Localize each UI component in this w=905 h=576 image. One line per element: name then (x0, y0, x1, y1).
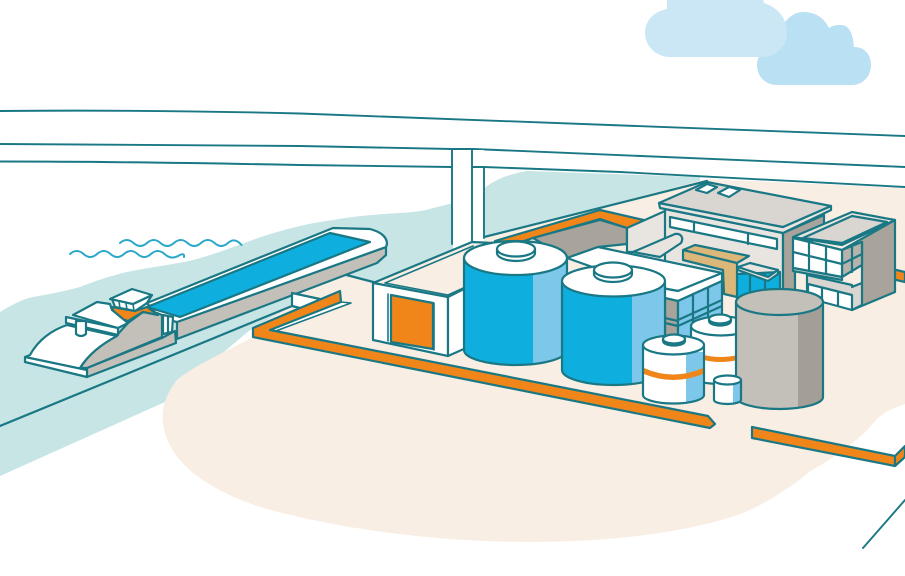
tan portico (683, 245, 749, 297)
road edge line (863, 500, 905, 548)
blue lobby glazing (737, 272, 780, 298)
orange wall: front right (752, 427, 905, 466)
garage roof (373, 242, 493, 297)
garage (373, 242, 493, 356)
tank: large blue rear (464, 241, 567, 365)
garage front (373, 283, 448, 356)
low wall beside yard (627, 211, 668, 252)
tug orange deck (112, 307, 158, 321)
land edge behind plant (484, 181, 707, 237)
waves (70, 240, 242, 258)
skylights (696, 184, 740, 197)
process building roof (567, 247, 722, 291)
white process building (567, 247, 722, 345)
annex lower band (807, 275, 862, 310)
river water (0, 171, 700, 476)
tug post (163, 315, 173, 334)
annex roof (793, 212, 895, 245)
canopy (738, 263, 778, 281)
roof (659, 182, 831, 227)
tug bow (25, 325, 117, 377)
land area (163, 179, 905, 542)
barge (25, 228, 387, 377)
tug upper deck (73, 302, 128, 328)
quay block (292, 293, 320, 308)
bridge pillar (452, 149, 484, 249)
cloud: rear (757, 12, 871, 85)
side annex (793, 212, 895, 310)
tug lower hull (87, 331, 176, 377)
horizontal pipe (633, 234, 682, 257)
barge deck (147, 228, 387, 322)
roof edge (659, 203, 831, 233)
annex upper windows (793, 238, 842, 277)
process building grey wall (665, 298, 678, 345)
annex lower windows (808, 284, 852, 310)
tank: grey (736, 289, 823, 409)
barge cargo hold (147, 233, 370, 317)
tug superstructure side (80, 312, 162, 368)
tank: white front with orange band (643, 334, 704, 404)
shoreline (0, 306, 292, 426)
orange wall: back (495, 210, 648, 244)
process building fascia (640, 273, 722, 301)
window strip (670, 217, 777, 249)
tank: white rear with orange band (691, 314, 751, 384)
garage door (391, 295, 433, 349)
orange wall: front left (253, 291, 715, 428)
building front wall (665, 209, 783, 295)
tug funnel (76, 321, 86, 336)
quay edge (292, 272, 377, 294)
barge hull side (177, 247, 386, 339)
main building (633, 182, 831, 298)
building dark side (783, 215, 824, 295)
tank: small (714, 376, 741, 404)
bridge deck (0, 111, 905, 187)
recessed yard (533, 220, 627, 258)
annex side windows (842, 242, 862, 277)
orange wall: far right (892, 269, 905, 282)
wheelhouse (112, 295, 152, 311)
annex dark walls (842, 220, 895, 310)
tank: large blue front (562, 262, 665, 385)
cloud: front (645, 0, 787, 57)
garage side (448, 288, 466, 356)
process building glazing (678, 281, 722, 345)
